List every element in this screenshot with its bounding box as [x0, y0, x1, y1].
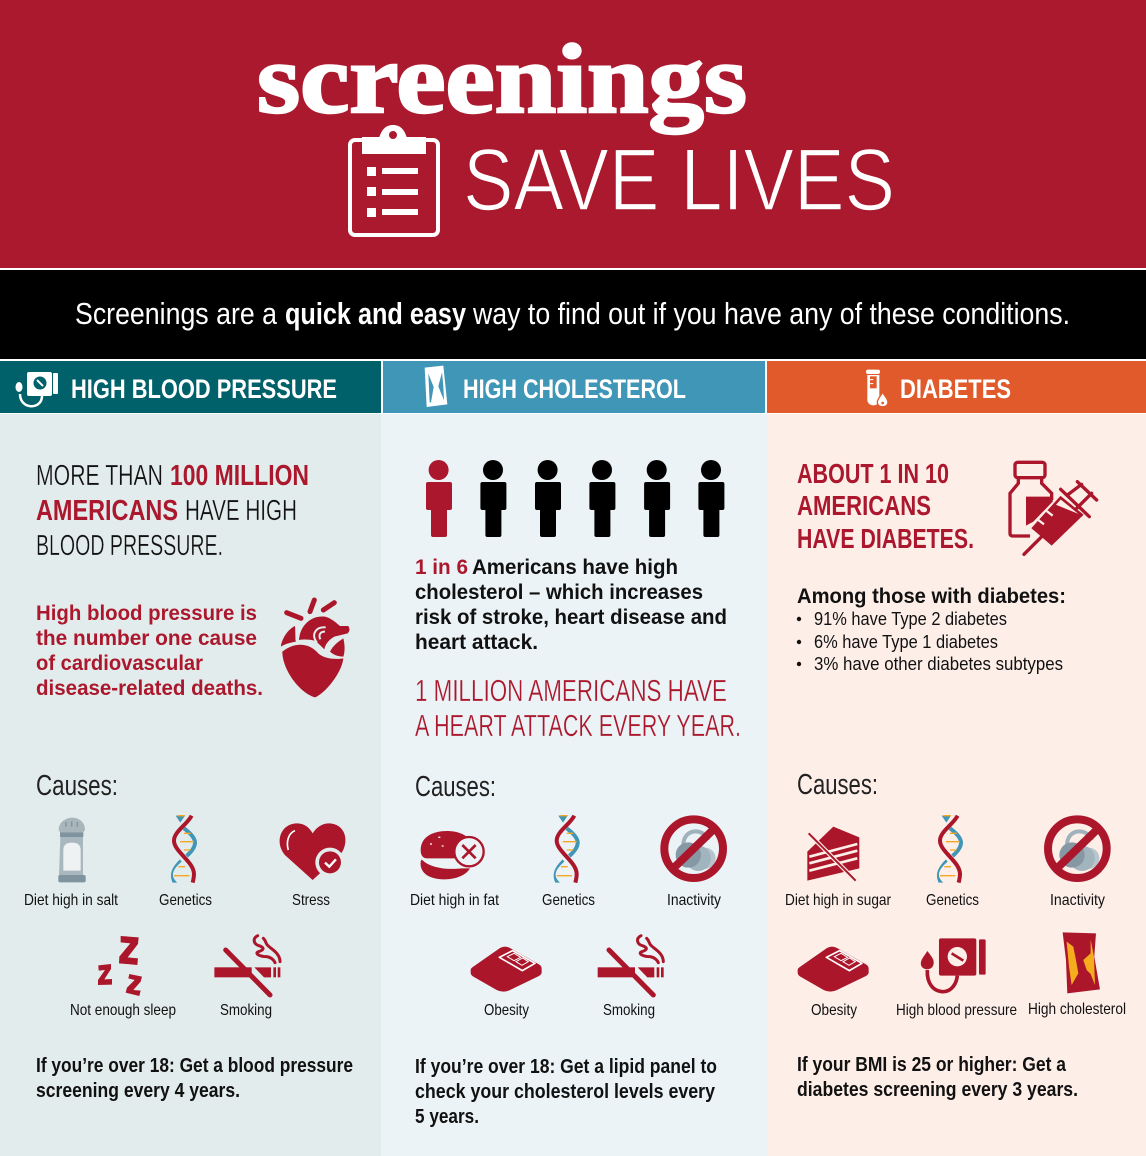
panel: diabetes — [767, 361, 1146, 1156]
column header: high blood pressure — [0, 361, 381, 413]
cause: not enough sleep: Not enough sleep — [70, 1002, 176, 1019]
title: screenings: screenings — [257, 25, 747, 134]
pictogram: 1 in 6 people — [426, 460, 724, 537]
text: 1 in 6 americans: 1 in 6 — [415, 556, 468, 579]
cause: genetics — [159, 816, 212, 909]
cause: genetics — [542, 816, 595, 909]
column header: high blood pressure: HIGH BLOOD PRESSURE — [71, 374, 337, 404]
column header: high cholesterol: HIGH CHOLESTEROL — [463, 374, 686, 404]
text: among those with diabetes — [797, 585, 1066, 674]
list: diabetes types — [797, 609, 1063, 674]
callout: 1 million heart attacks: A HEART ATTACK EVERY YEAR. — [415, 708, 741, 743]
cause: smoking: Smoking — [220, 1002, 272, 1019]
intro band: Screenings are a — [75, 296, 278, 331]
cause: not enough sleep — [70, 936, 176, 1019]
cause: genetics: Genetics — [926, 892, 979, 909]
recommendation: lipid panel: If you’re over 18: Get a lipid panel to — [415, 1056, 717, 1078]
icon: insulin bottle and syringe — [1010, 462, 1097, 554]
headline: 100 million americans: MORE THAN — [36, 460, 163, 492]
cause: inactivity — [1048, 819, 1107, 909]
recommendation: lipid panel — [415, 1056, 717, 1128]
headline: about 1 in 10: ABOUT 1 IN 10 — [797, 458, 949, 489]
cause: obesity: Obesity — [484, 1002, 529, 1019]
list: diabetes types: 3% have other diabetes subtypes — [814, 654, 1063, 674]
icon: test tube and drop — [866, 370, 888, 407]
cause: obesity: Obesity — [811, 1002, 857, 1019]
panel: high blood pressure — [0, 361, 381, 1156]
recommendation: lipid panel: check your cholesterol levels every — [415, 1081, 716, 1103]
cause: high blood pressure — [896, 938, 1017, 1019]
column header: diabetes: DIABETES — [900, 374, 1011, 404]
callout: number one cause: High blood pressure is — [36, 602, 257, 625]
label: causes: Causes: — [797, 769, 878, 801]
cause: genetics: Genetics — [159, 892, 212, 909]
cause: diet high in salt — [24, 818, 118, 909]
text: 1 in 6 americans: heart attack. — [415, 631, 538, 654]
recommendation: diabetes screening: diabetes screening every 3 years. — [797, 1079, 1078, 1101]
recommendation: blood pressure screening: screening every 4 years. — [36, 1080, 240, 1102]
icon: artery — [425, 366, 447, 407]
cause: high cholesterol — [1028, 932, 1126, 1018]
text: 1 in 6 americans — [415, 556, 727, 654]
headline: 100 million americans: HAVE HIGH — [185, 495, 297, 527]
intro band: way to find out if you have any of these conditions. — [472, 296, 1070, 331]
list: diabetes types: 91% have Type 2 diabetes — [814, 609, 1007, 629]
cause: smoking — [598, 936, 664, 1019]
headline: about 1 in 10: HAVE DIABETES. — [797, 523, 974, 554]
recommendation: lipid panel: 5 years. — [415, 1106, 479, 1128]
icon: clipboard — [350, 125, 438, 235]
label: causes: Causes: — [415, 771, 496, 803]
title banner — [0, 0, 1146, 268]
text: among those with diabetes: Among those with diabetes: — [797, 585, 1066, 608]
cause: obesity — [471, 947, 542, 1019]
recommendation: blood pressure screening: If you’re over 18: Get a blood pressure — [36, 1055, 353, 1077]
cause: inactivity: Inactivity — [1050, 892, 1105, 909]
callout: number one cause — [36, 602, 263, 700]
cause: high blood pressure: High blood pressure — [896, 1002, 1017, 1019]
intro band: quick and easy — [285, 296, 467, 331]
cause: diet high in salt: Diet high in salt — [24, 892, 118, 909]
list: diabetes types: 6% have Type 1 diabetes — [814, 632, 998, 652]
cause: diet high in fat: Diet high in fat — [410, 892, 499, 909]
text: 1 in 6 americans: Americans have high — [472, 556, 678, 579]
intro band — [0, 270, 1146, 359]
cause: genetics — [926, 816, 979, 909]
cause: high cholesterol: High cholesterol — [1028, 1001, 1126, 1018]
cause: smoking: Smoking — [603, 1002, 655, 1019]
label: causes: Causes: — [36, 770, 118, 802]
recommendation: blood pressure screening — [36, 1055, 353, 1102]
headline: 100 million americans: 100 MILLION — [170, 460, 309, 492]
cause: diet high in fat — [410, 831, 499, 909]
callout: number one cause: of cardiovascular — [36, 652, 203, 675]
column header: diabetes — [767, 361, 1146, 413]
callout: 1 million heart attacks — [415, 673, 741, 743]
cause: stress — [280, 823, 346, 909]
panel: high cholesterol — [381, 361, 767, 1156]
cause: genetics: Genetics — [542, 892, 595, 909]
recommendation: diabetes screening: If your BMI is 25 or higher: Get a — [797, 1054, 1067, 1076]
cause: diet high in sugar: Diet high in sugar — [785, 892, 892, 909]
headline: about 1 in 10: AMERICANS — [797, 490, 931, 521]
headline: 100 million americans: BLOOD PRESSURE. — [36, 530, 223, 562]
headline: about 1 in 10 — [797, 458, 974, 554]
cause: diet high in sugar — [785, 827, 892, 909]
cause: inactivity — [664, 819, 723, 909]
column header: high cholesterol — [383, 361, 765, 413]
cause: inactivity: Inactivity — [667, 892, 721, 909]
callout: 1 million heart attacks: 1 MILLION AMERICANS HAVE — [415, 673, 727, 708]
cause: smoking — [214, 936, 280, 1019]
callout: number one cause: disease-related deaths. — [36, 677, 263, 700]
cause: obesity — [798, 947, 869, 1019]
title: save lives: SAVE LIVES — [463, 130, 895, 229]
callout: number one cause: the number one cause — [36, 627, 257, 650]
icon: blood pressure cuff — [16, 372, 58, 406]
icon: anatomical heart — [281, 600, 350, 697]
cause: stress: Stress — [292, 892, 330, 909]
text: 1 in 6 americans: cholesterol – which increases — [415, 581, 703, 604]
recommendation: diabetes screening — [797, 1054, 1078, 1101]
text: 1 in 6 americans: risk of stroke, heart disease and — [415, 606, 727, 629]
headline: 100 million americans — [36, 460, 309, 562]
headline: 100 million americans: AMERICANS — [36, 495, 178, 527]
